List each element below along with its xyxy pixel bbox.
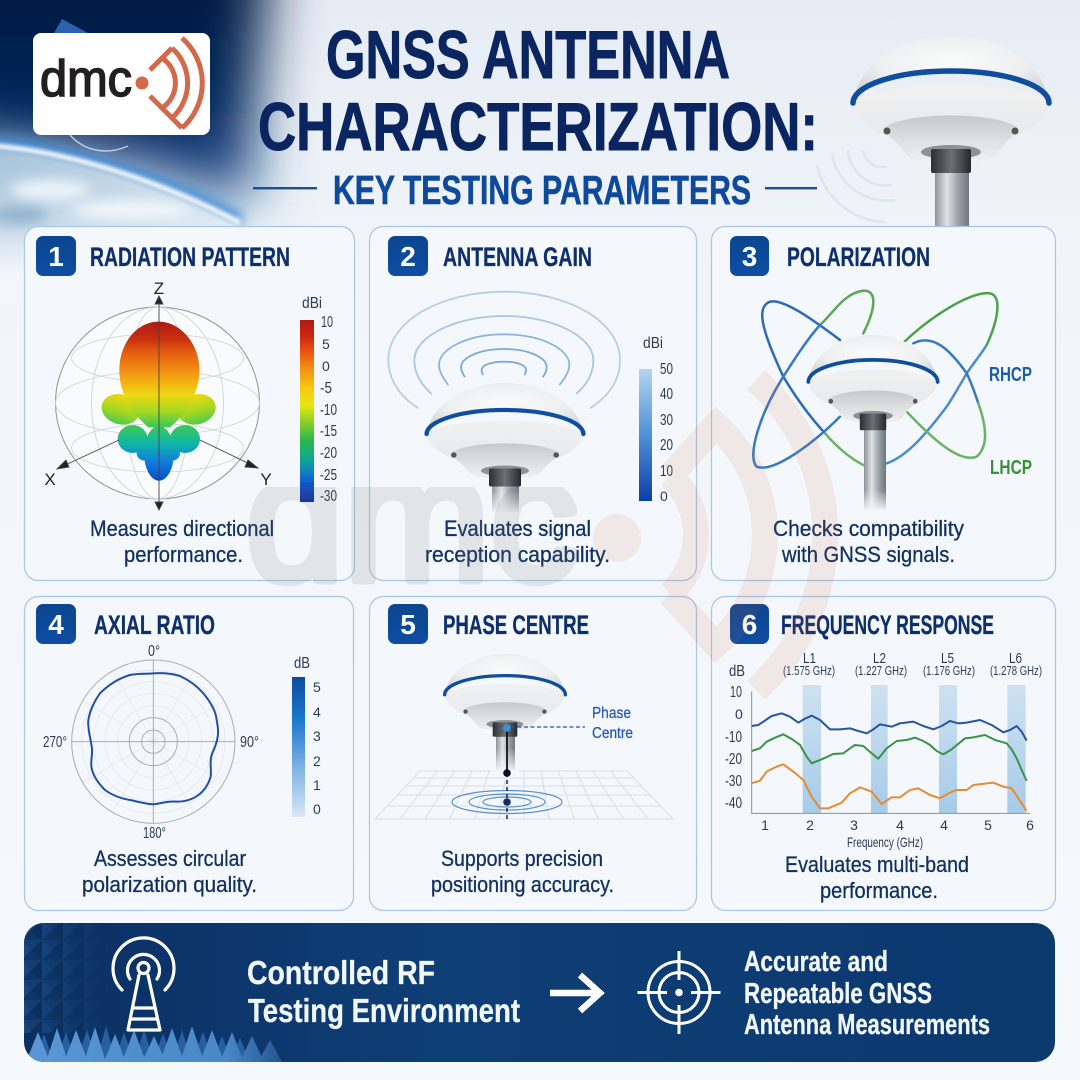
heading: POLARIZATION bbox=[787, 242, 930, 272]
heading: RADIATION PATTERN bbox=[90, 242, 290, 272]
colour scale: -15 bbox=[320, 423, 337, 440]
description: Evaluates signal bbox=[444, 516, 591, 541]
ratio scale: 1 bbox=[313, 777, 321, 793]
band labels: (1.278 GHz) bbox=[990, 663, 1042, 678]
panel: radiation pattern bbox=[24, 226, 354, 580]
panel: phase centre bbox=[370, 596, 696, 910]
title bbox=[258, 17, 818, 165]
badge 1: 1 bbox=[48, 241, 64, 272]
band labels: L6 bbox=[1009, 650, 1022, 667]
gain scale: 50 bbox=[660, 361, 673, 378]
axis labels: -40 bbox=[725, 795, 742, 812]
axis title: Frequency (GHz) bbox=[847, 834, 923, 850]
signal waves bbox=[388, 292, 620, 408]
heading: PHASE CENTRE bbox=[443, 610, 589, 640]
subtitle: KEY TESTING PARAMETERS bbox=[333, 167, 751, 213]
description: reception capability. bbox=[425, 542, 610, 567]
ratio scale: 5 bbox=[313, 679, 321, 695]
colour scale: 5 bbox=[322, 336, 330, 352]
antenna bbox=[445, 654, 565, 772]
arrow bbox=[550, 975, 600, 1011]
description: positioning accuracy. bbox=[431, 872, 614, 897]
panel: frequency response bbox=[712, 596, 1056, 910]
badge 3 bbox=[730, 236, 769, 276]
antenna bbox=[808, 335, 938, 511]
description: polarization quality. bbox=[82, 872, 257, 897]
ratio scale bbox=[292, 655, 321, 817]
badge 6 bbox=[730, 604, 769, 644]
panel: axial ratio bbox=[24, 596, 354, 910]
colour scale: -20 bbox=[320, 445, 337, 462]
axis labels bbox=[44, 279, 272, 489]
gain scale: 20 bbox=[660, 437, 673, 454]
polar labels: 180° bbox=[143, 825, 166, 842]
ground grid bbox=[375, 771, 673, 819]
logo card bbox=[33, 33, 210, 135]
colour scale bbox=[300, 295, 337, 505]
description: Measures directional bbox=[90, 516, 274, 541]
colour scale: dBi bbox=[302, 295, 322, 312]
axis labels: 5 bbox=[984, 817, 992, 833]
badge 1 bbox=[36, 236, 76, 276]
badge 2: 2 bbox=[400, 241, 416, 272]
colour scale: -25 bbox=[320, 467, 337, 484]
panel: antenna gain bbox=[370, 226, 696, 580]
axis labels bbox=[725, 663, 1034, 833]
heading: AXIAL RATIO bbox=[94, 610, 215, 640]
axis labels: X bbox=[44, 470, 56, 489]
banner text right: Accurate and bbox=[744, 946, 888, 978]
ratio scale: 0 bbox=[313, 801, 321, 817]
phase axis bbox=[503, 724, 585, 819]
banner text left bbox=[247, 954, 520, 1029]
badge 5 bbox=[388, 604, 428, 644]
polar trace bbox=[88, 673, 218, 804]
description: Assesses circular bbox=[94, 846, 246, 871]
badge 6: 6 bbox=[742, 609, 757, 640]
gain scale: dBi bbox=[643, 335, 663, 352]
colour scale: -10 bbox=[320, 402, 337, 419]
band labels: L2 bbox=[873, 650, 886, 667]
gain scale: 40 bbox=[660, 386, 673, 403]
description bbox=[82, 846, 257, 897]
sphere grid bbox=[56, 307, 260, 499]
ratio scale: dB bbox=[294, 655, 310, 672]
axis labels: Y bbox=[260, 470, 272, 489]
polarization loops bbox=[753, 291, 997, 468]
axis labels: -30 bbox=[725, 773, 742, 790]
axis labels: Z bbox=[154, 279, 164, 298]
description bbox=[425, 516, 610, 567]
satellite solar panel bbox=[54, 19, 128, 151]
description: performance. bbox=[820, 878, 938, 903]
gain scale: 30 bbox=[660, 412, 673, 429]
anechoic chamber foam bbox=[24, 923, 282, 1062]
title: CHARACTERIZATION: bbox=[258, 89, 818, 165]
axis labels: 10 bbox=[730, 684, 742, 701]
axis labels: 0 bbox=[735, 706, 743, 722]
phase centre label: Centre bbox=[592, 725, 633, 742]
axis labels: -10 bbox=[725, 729, 742, 746]
banner text left: Controlled RF bbox=[247, 954, 435, 991]
hero antenna bbox=[853, 35, 1049, 227]
space and earth backdrop bbox=[0, 0, 276, 305]
axis labels: 3 bbox=[850, 817, 858, 833]
LHCP label: LHCP bbox=[990, 457, 1032, 479]
polar labels: 270° bbox=[43, 734, 67, 751]
icon: radio tower bbox=[113, 938, 174, 1030]
icon: target bbox=[638, 951, 720, 1034]
band labels: L5 bbox=[941, 650, 954, 667]
watermark logo bbox=[246, 380, 825, 690]
description: Supports precision bbox=[441, 846, 603, 871]
gain scale: 10 bbox=[660, 463, 673, 480]
colour scale: -5 bbox=[320, 380, 332, 397]
banner text right bbox=[744, 946, 990, 1041]
colour scale: 0 bbox=[322, 358, 330, 374]
RHCP label: RHCP bbox=[989, 364, 1032, 386]
badge 4: 4 bbox=[48, 609, 64, 640]
badge 2 bbox=[388, 236, 428, 276]
ratio scale: 3 bbox=[313, 728, 321, 744]
description: Checks compatibility bbox=[773, 516, 964, 541]
polar chart bbox=[72, 660, 235, 823]
panel: polarization bbox=[712, 226, 1056, 580]
gain scale bbox=[639, 335, 673, 504]
background signal arcs bbox=[817, 150, 895, 222]
banner text right: Antenna Measurements bbox=[744, 1009, 990, 1041]
polar labels: 90° bbox=[240, 734, 259, 751]
line chart bbox=[752, 685, 1030, 813]
ratio scale: 4 bbox=[313, 704, 321, 720]
banner text left: Testing Environment bbox=[248, 992, 520, 1029]
badge 4 bbox=[36, 604, 76, 644]
description bbox=[785, 852, 969, 903]
colour scale: -30 bbox=[320, 488, 337, 505]
heading: ANTENNA GAIN bbox=[443, 242, 592, 272]
description: with GNSS signals. bbox=[781, 542, 955, 567]
logo wordmark: dmc bbox=[40, 50, 132, 107]
target rings bbox=[452, 790, 562, 814]
polar labels: 0° bbox=[148, 643, 160, 660]
phase centre label: Phase bbox=[592, 705, 631, 722]
axis labels: dB bbox=[729, 663, 745, 680]
phase centre label bbox=[592, 705, 633, 742]
description bbox=[773, 516, 964, 567]
ratio scale: 2 bbox=[313, 753, 321, 769]
band labels: (1.227 GHz) bbox=[855, 663, 907, 678]
axis labels: 6 bbox=[1026, 817, 1034, 833]
axis labels: 1 bbox=[761, 817, 769, 833]
description bbox=[431, 846, 614, 897]
watermark logo: dmc bbox=[246, 419, 578, 618]
band labels: L1 bbox=[803, 650, 816, 667]
axis labels: 4 bbox=[896, 817, 904, 833]
badge 3: 3 bbox=[742, 241, 757, 272]
polar labels bbox=[43, 643, 259, 842]
axis labels: 4 bbox=[940, 817, 948, 833]
banner text right: Repeatable GNSS bbox=[744, 978, 932, 1010]
axis labels: -20 bbox=[725, 751, 742, 768]
description bbox=[90, 516, 274, 567]
axis labels: 2 bbox=[806, 817, 814, 833]
badge 5: 5 bbox=[400, 609, 416, 640]
description: Evaluates multi-band bbox=[785, 852, 969, 877]
band labels: (1.575 GHz) bbox=[783, 663, 835, 678]
logo signal arcs bbox=[136, 38, 202, 128]
colour scale: 10 bbox=[321, 314, 333, 331]
band labels bbox=[783, 650, 1042, 678]
axes bbox=[57, 296, 258, 510]
band labels: (1.176 GHz) bbox=[923, 663, 975, 678]
footer banner bbox=[24, 923, 1055, 1062]
title: GNSS ANTENNA bbox=[326, 17, 730, 93]
lobes bbox=[98, 322, 219, 481]
antenna bbox=[427, 383, 583, 514]
gain scale: 0 bbox=[660, 488, 668, 504]
description: performance. bbox=[124, 542, 243, 567]
